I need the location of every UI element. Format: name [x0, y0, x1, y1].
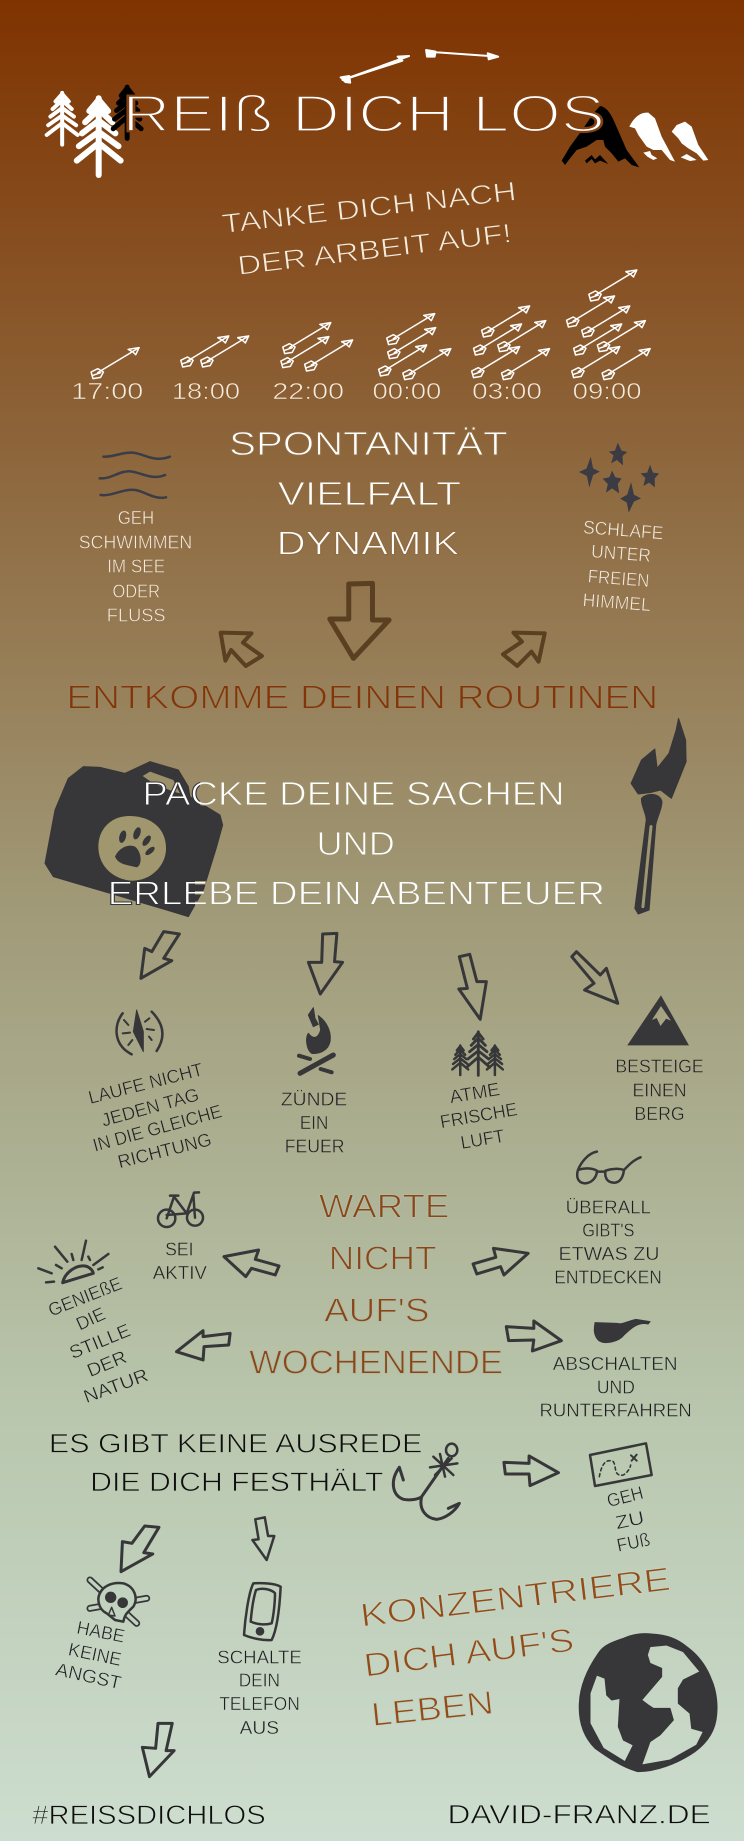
text: air: LUFT	[459, 1125, 506, 1153]
text: air	[438, 1078, 519, 1153]
arrow: fire	[308, 933, 343, 994]
heading: do not wait: NICHT	[329, 1239, 436, 1276]
column 03:00	[472, 306, 549, 404]
heading: no excuse: DIE DICH FESTHÄLT	[90, 1467, 383, 1497]
icon: skull and crossbones	[90, 1580, 147, 1623]
subtitle: DER ARBEIT AUF!	[236, 218, 513, 281]
text: discover: ETWAS ZU	[558, 1243, 660, 1264]
arrow: title left	[341, 56, 409, 83]
text: phone off: TELEFON	[219, 1693, 300, 1714]
heading: pack your things: UND	[316, 825, 395, 862]
text: swim: GEH	[118, 507, 154, 528]
text: walk on foot: ZU	[613, 1507, 646, 1533]
panel: routines	[45, 425, 686, 917]
text: fire	[281, 1089, 347, 1156]
text: enjoy silence: STILLE	[66, 1319, 133, 1363]
panel: no excuses	[32, 1428, 717, 1830]
heading: pack your things: ERLEBE DEIN ABENTEUER	[108, 874, 605, 911]
icon: black pine	[113, 87, 141, 138]
text: sleep outside: UNTER	[591, 540, 652, 566]
icon: bike	[158, 1192, 203, 1227]
chart: arrows per time	[71, 270, 650, 404]
text: phone off: SCHALTE	[217, 1646, 302, 1667]
icon: forest	[452, 1032, 503, 1075]
text: fire: FEUER	[285, 1135, 344, 1156]
arrow: up right	[503, 633, 545, 666]
arrow: to phone	[252, 1517, 274, 1560]
icon: camera	[45, 762, 223, 917]
subtitle: TANKE DICH NACH	[220, 176, 518, 239]
column 00:00	[372, 314, 451, 404]
text: sleep outside: SCHLAFE	[582, 516, 664, 543]
text: sleep outside	[582, 516, 664, 615]
text: switch off: RUNTERFAHREN	[540, 1400, 692, 1421]
icon: glasses	[577, 1152, 641, 1183]
text: climb	[615, 1056, 704, 1124]
text: walk	[86, 1059, 224, 1172]
heading: do not wait: AUF'S	[324, 1292, 429, 1329]
icon: large white pine	[77, 98, 121, 175]
text: walk: IN DIE GLEICHE	[90, 1100, 224, 1156]
arrow: big down	[330, 583, 389, 658]
icon: black mountain	[562, 106, 639, 167]
arrow: title right	[426, 50, 498, 59]
footer: hashtag: #REISSDICHLOS	[32, 1800, 266, 1830]
text: switch off: UND	[597, 1376, 635, 1397]
heading: focus on life: KONZENTRIERE	[358, 1560, 672, 1634]
text: walk: JEDEN TAG	[99, 1084, 201, 1131]
text: discover	[554, 1196, 662, 1287]
icon: match	[631, 718, 686, 914]
arrow: mountain	[572, 952, 618, 1003]
heading: do not wait	[249, 1188, 503, 1380]
text: swim: IM SEE	[107, 556, 165, 577]
column 18:00: 18:00	[172, 378, 240, 404]
heading: no excuse	[49, 1428, 422, 1497]
text: no fear	[54, 1617, 127, 1693]
column 18:00	[172, 336, 249, 404]
icon: pipe	[594, 1319, 650, 1343]
heading: values: DYNAMIK	[277, 524, 459, 561]
arrow: to glasses	[473, 1248, 528, 1275]
text: fire: EIN	[300, 1112, 328, 1133]
heading: no excuse: ES GIBT KEINE AUSREDE	[49, 1428, 422, 1458]
arrow: to skull	[121, 1526, 159, 1572]
text: no fear: KEINE	[67, 1638, 123, 1670]
text: sleep outside: HIMMEL	[582, 589, 652, 615]
column 17:00	[71, 348, 143, 404]
text: discover: GIBT'S	[582, 1220, 634, 1241]
text: air: ATME	[448, 1078, 501, 1107]
icon: map	[590, 1443, 652, 1486]
column 09:00: 09:00	[573, 378, 642, 404]
arrow: to bike	[224, 1250, 279, 1277]
icon: small white pine	[47, 93, 78, 145]
column 22:00: 22:00	[272, 378, 344, 404]
text: enjoy silence	[45, 1272, 151, 1407]
icon: stars	[579, 443, 659, 513]
heading: values	[229, 425, 508, 561]
heading: values: VIELFALT	[278, 475, 461, 512]
icon: phone	[244, 1583, 281, 1640]
title: REIß DICH LOS	[122, 86, 605, 144]
text: fire: ZÜNDE	[281, 1089, 347, 1110]
heading: focus on life	[358, 1560, 672, 1733]
column 22:00	[272, 323, 353, 404]
column 17:00: 17:00	[71, 378, 143, 404]
text: no fear: ANGST	[54, 1658, 123, 1693]
text: walk on foot: GEH	[605, 1482, 645, 1511]
text: enjoy silence: GENIEßE	[45, 1272, 125, 1320]
text: walk on foot: FUß	[615, 1528, 652, 1556]
heading: do not wait: WOCHENENDE	[249, 1343, 503, 1380]
text: walk: LAUFE NICHT	[86, 1059, 205, 1108]
text: phone off: DEIN	[239, 1670, 280, 1691]
text: swim: SCHWIMMEN	[79, 532, 192, 553]
text: swim: FLUSS	[107, 605, 166, 626]
text: enjoy silence: NATUR	[81, 1364, 151, 1407]
icon: campfire	[299, 1008, 333, 1073]
heading: values: SPONTANITÄT	[229, 425, 508, 462]
text: be active	[153, 1238, 208, 1283]
text: switch off	[540, 1353, 692, 1421]
arrow: air	[459, 954, 486, 1019]
arrow: up left	[221, 633, 262, 666]
heading: pack your things	[108, 775, 605, 911]
text: discover: ENTDECKEN	[554, 1266, 662, 1287]
panel: adventure	[38, 932, 704, 1421]
heading: do not wait: WARTE	[319, 1188, 449, 1225]
text: climb: EINEN	[632, 1080, 687, 1101]
heading: focus on life: DICH AUF'S	[362, 1621, 576, 1684]
text: no fear: HABE	[75, 1617, 127, 1647]
text: swim	[79, 507, 192, 626]
text: swim: ODER	[112, 580, 160, 601]
icon: mountain	[627, 995, 689, 1045]
icon: waves	[100, 453, 170, 498]
text: walk: RICHTUNG	[115, 1128, 214, 1172]
heading: focus on life: LEBEN	[369, 1684, 495, 1733]
footer: website: DAVID-FRANZ.DE	[448, 1799, 711, 1829]
column 00:00: 00:00	[372, 378, 441, 404]
text: switch off: ABSCHALTEN	[553, 1353, 678, 1374]
text: climb: BESTEIGE	[615, 1056, 704, 1077]
text: walk on foot	[605, 1482, 652, 1556]
subtitle	[220, 176, 518, 281]
text: enjoy silence: DER	[84, 1346, 130, 1381]
text: sleep outside: FREIEN	[587, 565, 650, 591]
text: discover: ÜBERALL	[566, 1196, 651, 1217]
arrow: compass	[141, 932, 179, 978]
arrow: to map	[504, 1456, 558, 1486]
arrow: to nature	[177, 1331, 230, 1360]
heading: escape routines: ENTKOMME DEINEN ROUTINEN	[66, 678, 658, 715]
text: climb: BERG	[634, 1103, 685, 1124]
text: phone off: AUS	[240, 1717, 279, 1738]
icon: compass	[117, 1010, 162, 1054]
heading: pack your things: PACKE DEINE SACHEN	[142, 775, 565, 812]
text: enjoy silence: DIE	[73, 1303, 108, 1334]
arrow: to pipe	[506, 1321, 561, 1351]
icon: fish hook	[393, 1444, 459, 1519]
text: air: FRISCHE	[438, 1098, 519, 1132]
text: be active: AKTIV	[153, 1262, 208, 1283]
text: be active: SEI	[165, 1238, 194, 1259]
panel: header	[47, 50, 708, 281]
arrow: to footer	[142, 1723, 174, 1777]
icon: globe	[579, 1634, 717, 1772]
text: phone off	[217, 1646, 302, 1738]
icon: white mountains	[629, 113, 708, 162]
column 09:00	[567, 270, 650, 404]
icon: sunrise	[38, 1241, 108, 1283]
column 03:00: 03:00	[472, 378, 542, 404]
